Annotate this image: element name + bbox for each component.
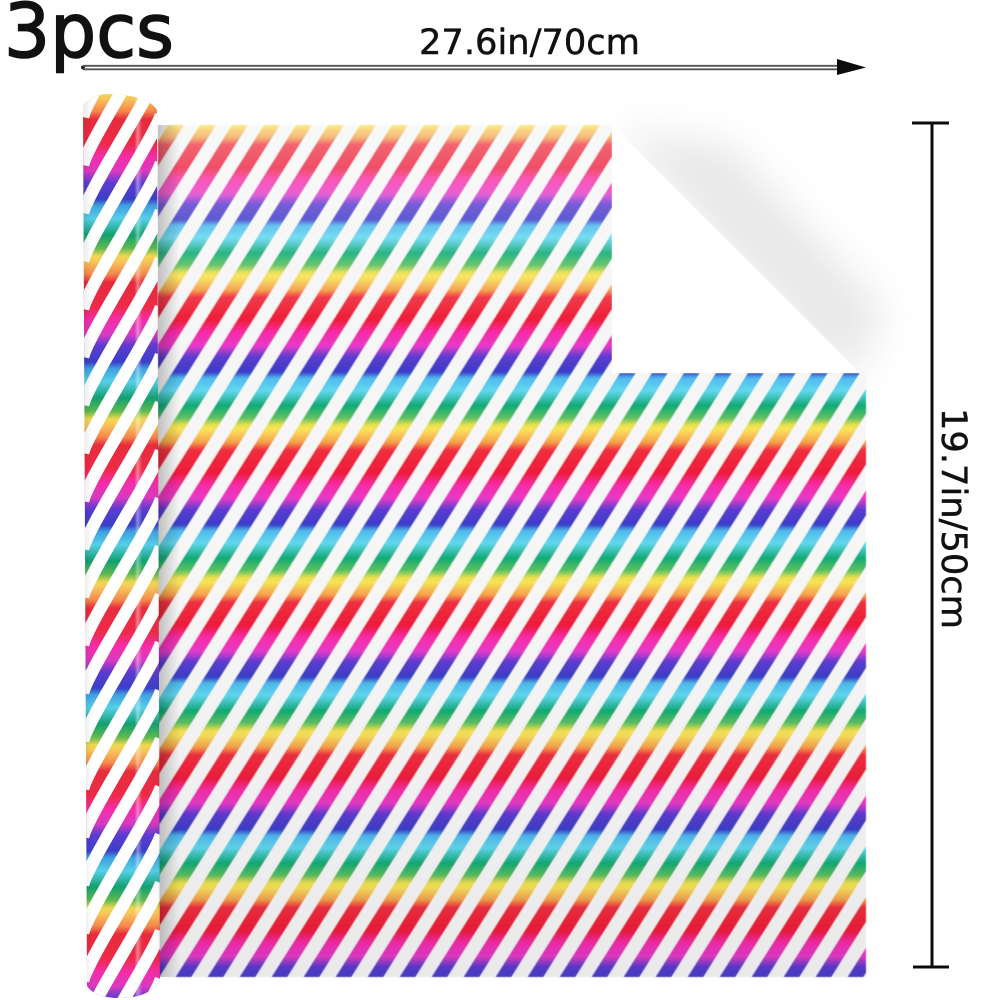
sheet white stripes <box>158 125 866 977</box>
height label: 19.7in/50cm <box>933 408 973 629</box>
wrapping paper sheet <box>158 125 866 977</box>
roll white stripes <box>83 90 161 1000</box>
arrow: width dimension <box>81 59 866 75</box>
roll of paper <box>80 90 164 1000</box>
fold triangle <box>612 125 860 373</box>
sheet top paling <box>158 125 612 330</box>
sheet bottom greying <box>158 600 866 977</box>
shadow cast by roll on sheet <box>158 125 180 977</box>
width label: 27.6in/70cm <box>419 23 640 63</box>
sheet rainbow foil <box>158 125 866 977</box>
roll highlight <box>83 90 161 1000</box>
fold shadow <box>615 130 885 385</box>
height dimension bar <box>912 123 949 967</box>
roll rainbow foil <box>80 90 164 1000</box>
